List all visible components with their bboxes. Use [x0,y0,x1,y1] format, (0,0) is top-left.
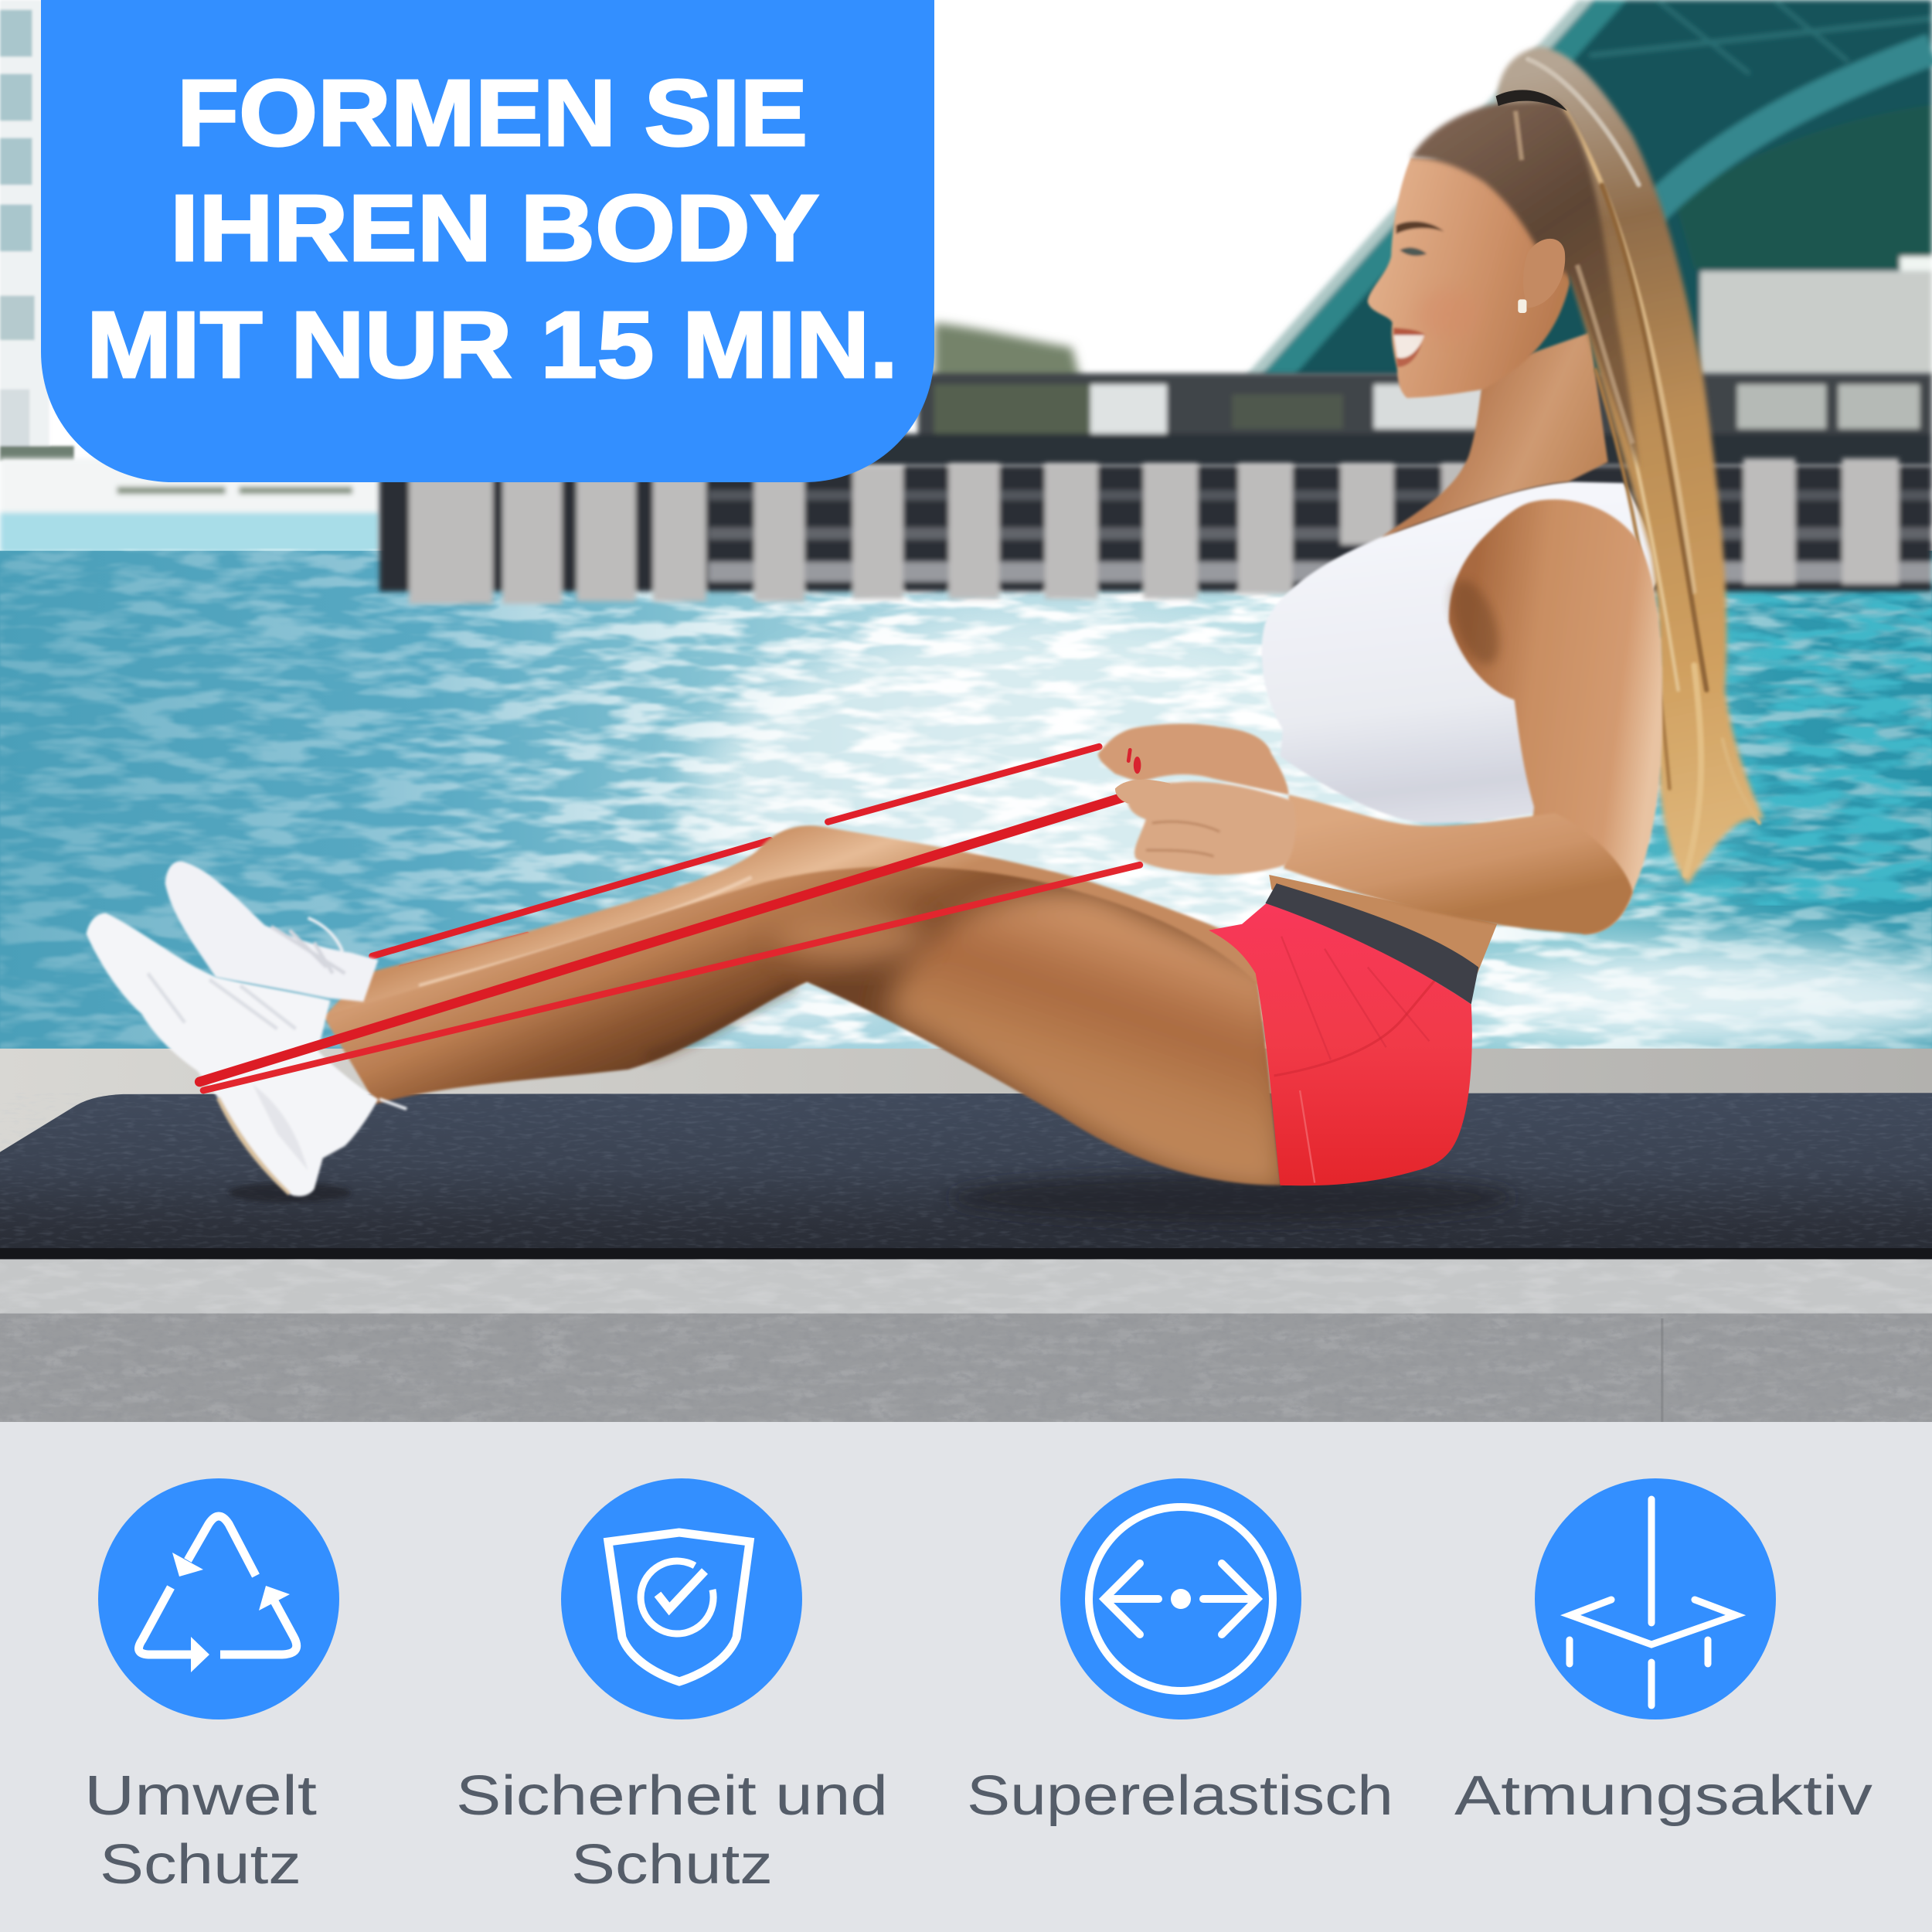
label: Sicherheit und [456,1765,888,1827]
woman: upper arm [1449,499,1662,934]
woman: armpit shadow [1441,574,1509,671]
woman: tank top [1262,481,1658,823]
woman: shorts [1209,902,1472,1185]
feature: Umwelt Schutz [84,1478,339,1896]
woman: far leg [323,825,1263,1022]
feature: Atmungsaktiv [1454,1478,1872,1827]
woman: forearm [1284,794,1633,934]
background: pier fence [376,373,1932,466]
headline text: MIT NUR 15 MIN. [87,292,898,397]
far shoe [165,861,378,1002]
concrete ledge behind mat [0,1049,1932,1159]
background: hotel building on the left [0,0,74,461]
woman: near leg [323,866,1287,1196]
woman: nails [1127,748,1141,774]
exercise mat [0,1093,1932,1259]
water [0,549,1932,1053]
icon: breathable layer with airflow [1535,1478,1776,1719]
woman: lower hand [1128,781,1296,875]
panel: features strip [0,1422,1932,1932]
woman: gripping fingers [1115,780,1171,804]
woman: waist skin [1269,875,1497,974]
concrete front wall [0,1259,1932,1424]
woman: neck and chest [1381,332,1608,537]
woman: ponytail [1497,47,1764,885]
resistance band: upper strand behind far leg [372,747,1099,968]
label: Atmungsaktiv [1454,1765,1872,1827]
woman: hair cap [1411,101,1639,468]
label: Umwelt [84,1765,317,1827]
woman: face [1368,158,1570,398]
near shoe [87,913,406,1196]
woman: upper hand [1098,723,1289,794]
headline text: FORMEN SIE [177,60,808,165]
feature: Superelastisch [967,1478,1393,1827]
headline banner [41,0,934,482]
woman: shorts waistband [1265,883,1478,1004]
label: Schutz [100,1834,301,1896]
icon: stretch arrows in circle [1060,1478,1301,1719]
background: bridge [1246,0,1932,376]
sky [0,0,1932,591]
headline text: IHREN BODY [170,175,819,281]
icon: recycling triangle [98,1478,339,1719]
woman: hair tie [1496,90,1567,111]
resistance band: front strands [199,796,1140,1090]
photo: woman exercising with resistance band by the water [0,0,1932,1424]
background: pier pillars [379,458,1932,604]
woman: ear and earring [1518,239,1565,313]
icon: shield with check [561,1478,802,1719]
background: pool wall [0,458,382,553]
headline text [87,60,898,397]
feature: Sicherheit und Schutz [456,1478,903,1896]
background: trees [934,323,1094,431]
label: Schutz [571,1834,773,1896]
label: Superelastisch [967,1765,1393,1827]
